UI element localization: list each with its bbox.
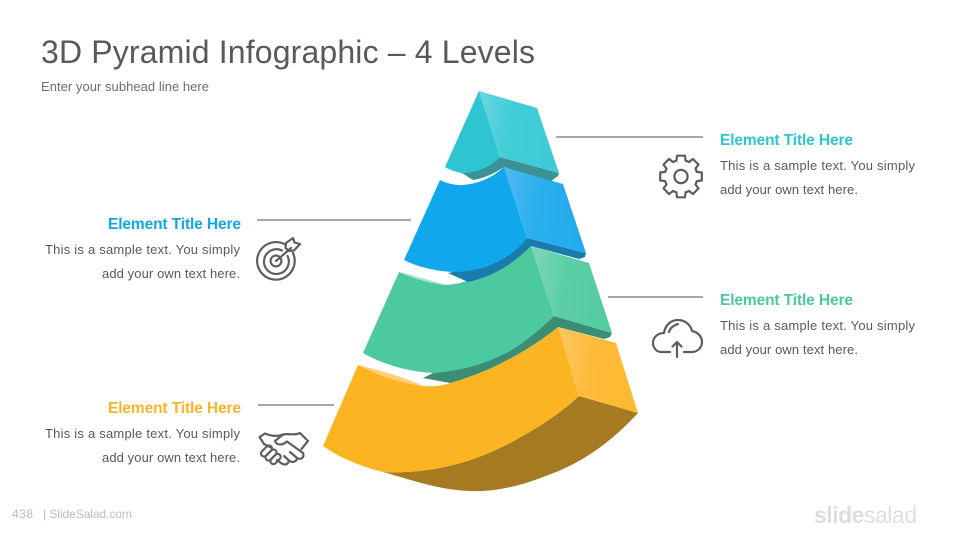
text block: level 1: add your own text here. bbox=[720, 182, 858, 197]
text block: level 3: add your own text here. bbox=[720, 342, 858, 357]
pyramid bbox=[323, 91, 638, 491]
connector: level 4 bbox=[258, 404, 334, 406]
text block: level 1: Element Title Here bbox=[720, 132, 853, 149]
text block: level 3 bbox=[720, 292, 916, 357]
text block: level 3: This is a sample text. You simply bbox=[720, 318, 916, 333]
connector: level 3 bbox=[608, 296, 703, 298]
title: 3D Pyramid Infographic – 4 Levels bbox=[41, 34, 535, 70]
text block: level 2: This is a sample text. You simply bbox=[45, 242, 240, 257]
text block: level 3: Element Title Here bbox=[720, 292, 853, 309]
level 2: blue bbox=[404, 167, 586, 282]
logo: slidesalad bbox=[814, 502, 917, 528]
subhead: Enter your subhead line here bbox=[41, 79, 209, 94]
icon: handshake bbox=[260, 433, 308, 465]
icon: target with arrow bbox=[257, 238, 300, 280]
level 3: green bbox=[363, 246, 612, 383]
icon: gear bbox=[660, 156, 702, 197]
icon: cloud upload bbox=[653, 320, 702, 357]
page number and site: | SlideSalad.com bbox=[43, 507, 132, 521]
connector: level 2 bbox=[257, 219, 411, 221]
level 1: teal top bbox=[445, 91, 559, 181]
text block: level 1: This is a sample text. You simply bbox=[720, 158, 916, 173]
level 4: yellow base bbox=[323, 327, 638, 491]
text block: level 4: This is a sample text. You simply bbox=[45, 426, 240, 441]
text block: level 4 bbox=[45, 400, 241, 465]
connector: level 1 bbox=[556, 136, 703, 138]
text block: level 4: Element Title Here bbox=[108, 400, 241, 417]
text block: level 2 bbox=[45, 216, 241, 281]
text block: level 4: add your own text here. bbox=[102, 450, 240, 465]
text block: level 2: Element Title Here bbox=[108, 216, 241, 233]
text block: level 2: add your own text here. bbox=[102, 266, 240, 281]
text block: level 1 bbox=[720, 132, 916, 197]
page number and site: 438 bbox=[12, 507, 33, 521]
